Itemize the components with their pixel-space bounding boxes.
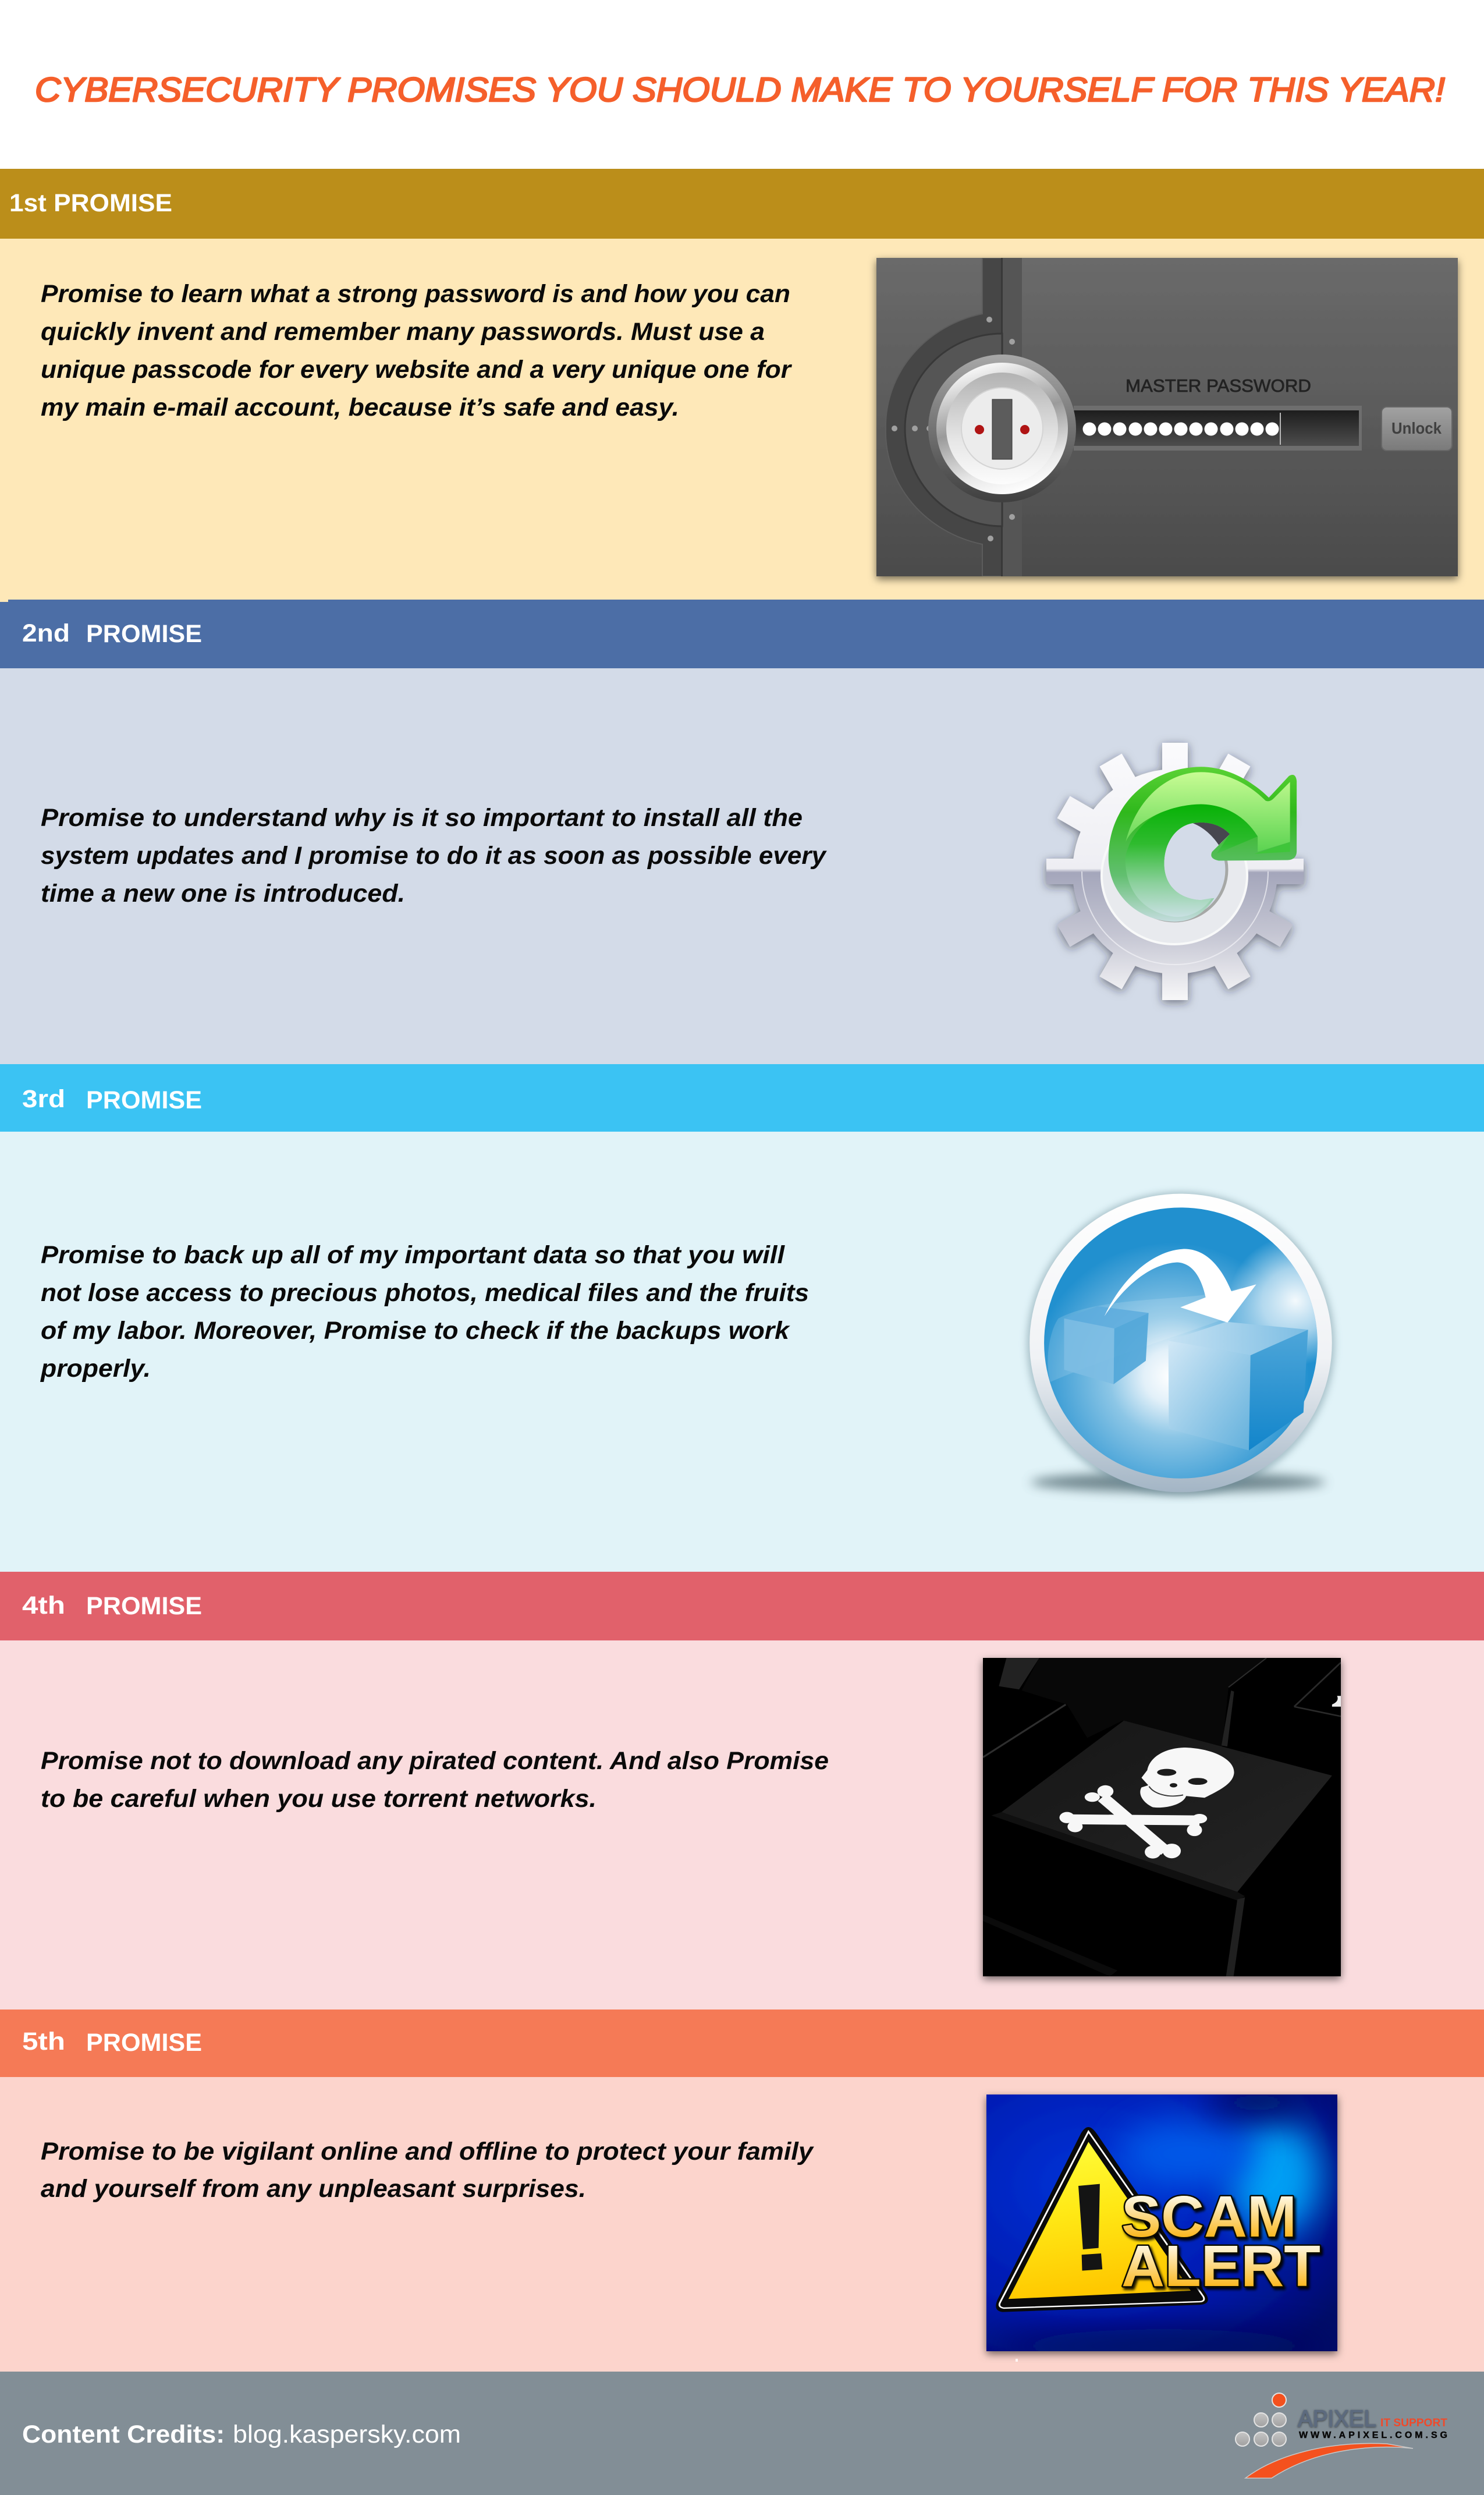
heading: PROMISE xyxy=(86,2029,202,2057)
icon: backup cubes disc xyxy=(1027,1192,1362,1496)
logo: apixel it support: IT SUPPORT xyxy=(1380,2417,1447,2429)
body text xyxy=(40,1241,809,1383)
icon: master password lock image: MASTER PASSWORD xyxy=(1126,375,1311,396)
title: CYBERSECURITY PROMISES YOU SHOULD MAKE TO YOURSELF FOR THIS YEAR! xyxy=(35,71,1445,109)
body text: not lose access to precious photos, medical files and the fruits xyxy=(41,1279,809,1307)
body text xyxy=(41,1747,829,1813)
panel background xyxy=(0,239,1484,602)
body text: Promise to understand why is it so important to install all the xyxy=(41,804,803,832)
header band xyxy=(0,169,1484,239)
heading xyxy=(22,2028,202,2057)
heading: 5th xyxy=(22,2028,65,2055)
scam alert words xyxy=(1121,2184,1320,2299)
body text: and yourself from any unpleasant surprises. xyxy=(41,2175,586,2203)
heading: 3rd xyxy=(22,1085,65,1113)
panel background xyxy=(0,668,1484,1064)
body text: to be careful when you use torrent networks. xyxy=(41,1785,597,1813)
panel background xyxy=(0,2077,1484,2372)
heading: 1st PROMISE xyxy=(9,189,172,217)
logo: apixel it support xyxy=(1236,2393,1447,2478)
body text: Promise to back up all of my important data so that you will xyxy=(41,1241,785,1269)
icon: gear with green update arrow xyxy=(1036,733,1315,1013)
scam alert words: SCAM xyxy=(1121,2184,1297,2249)
header band xyxy=(0,2010,1484,2077)
body text: Promise to be vigilant online and offline to protect your family xyxy=(41,2138,814,2166)
logo: apixel it support: WWW.APIXEL.COM.SG xyxy=(1299,2430,1447,2440)
icon: master password lock image: Unlock xyxy=(1391,419,1442,437)
header band xyxy=(0,600,1484,668)
footer xyxy=(0,2372,1484,2495)
body text: my main e-mail account, because it’s safe and easy. xyxy=(41,394,679,421)
body text: time a new one is introduced. xyxy=(41,880,405,908)
body text: Promise to learn what a strong password is and how you can xyxy=(41,280,790,308)
footer background xyxy=(0,2372,1484,2495)
heading: 4th xyxy=(22,1592,65,1619)
body text: properly. xyxy=(40,1355,151,1383)
heading: PROMISE xyxy=(86,620,202,648)
panel: 3rd promise xyxy=(0,1064,1484,1572)
panel: 4th promise xyxy=(0,1572,1484,2010)
body text: Promise not to download any pirated content. And also Promise xyxy=(41,1747,829,1775)
header band xyxy=(0,1572,1484,1640)
panel: 5th promise xyxy=(0,2010,1484,2372)
body text: of my labor. Moreover, Promise to check if the backups work xyxy=(41,1317,790,1345)
body text: quickly invent and remember many passwords. Must use a xyxy=(41,318,765,346)
content credits: Content Credits: xyxy=(22,2420,225,2448)
body text: system updates and I promise to do it as soon as possible every xyxy=(41,842,827,870)
content credits: blog.kaspersky.com xyxy=(233,2420,461,2448)
heading xyxy=(22,619,202,648)
icon: skull and crossbones key xyxy=(983,1658,1342,1976)
icon: scam alert image xyxy=(986,2090,1339,2363)
body text xyxy=(41,280,792,421)
panel: 2nd promise xyxy=(0,600,1484,1064)
body text xyxy=(41,804,827,908)
header band xyxy=(0,1064,1484,1132)
heading xyxy=(22,1085,202,1114)
panel background xyxy=(0,1132,1484,1572)
heading: 2nd xyxy=(22,619,70,647)
heading xyxy=(22,1592,202,1620)
panel: 1st promise xyxy=(0,169,1484,602)
heading: PROMISE xyxy=(86,1592,202,1620)
panel background xyxy=(0,1640,1484,2010)
body text: unique passcode for every website and a very unique one for xyxy=(41,356,792,384)
logo: apixel it support: APIXEL xyxy=(1298,2406,1376,2432)
content credits xyxy=(22,2420,461,2448)
scam alert words: ALERT xyxy=(1121,2234,1320,2299)
icon: master password lock image xyxy=(876,258,1458,576)
heading: PROMISE xyxy=(86,1086,202,1114)
body text xyxy=(41,2138,814,2203)
